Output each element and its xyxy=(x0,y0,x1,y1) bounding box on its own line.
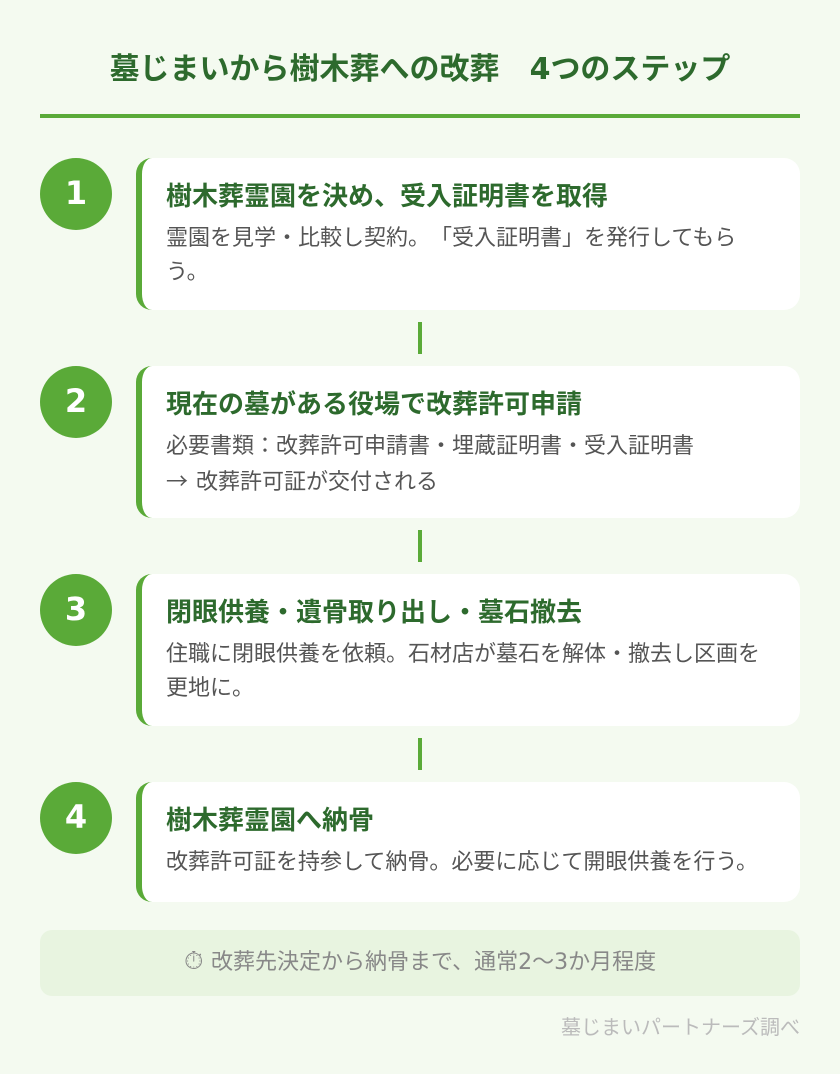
panel: step 1 xyxy=(136,158,800,310)
step 2 description: 必要書類：改葬許可申請書・埋蔵証明書・受入証明書 xyxy=(166,433,694,458)
step 3 description: 住職に閉眼供養を依頼。石材店が墓石を解体・撤去し区画を更地に。 xyxy=(166,641,760,700)
arrow: connector 3 to 4 xyxy=(418,738,422,770)
step 1 number: 1 xyxy=(65,174,87,212)
step 2 heading: 現在の墓がある役場で改葬許可申請 xyxy=(166,389,582,419)
step 1 number xyxy=(40,158,112,230)
step 4 heading: 樹木葬霊園へ納骨 xyxy=(166,805,374,835)
callout: duration note: ⏱ xyxy=(184,947,204,975)
step 2 description: 改葬許可証が交付される xyxy=(196,469,438,494)
arrow: connector 2 to 3 xyxy=(418,530,422,562)
panel: step 4 xyxy=(136,782,800,902)
panel: step 2 xyxy=(136,366,800,518)
step 1 description: 霊園を見学・比較し契約。「受入証明書」を発行してもらう。 xyxy=(166,225,736,284)
step 2 description xyxy=(166,433,694,496)
callout: duration note xyxy=(40,930,800,996)
step 2 number: 2 xyxy=(65,382,87,420)
source credit: 墓じまいパートナーズ調べ xyxy=(561,1017,800,1039)
arrow: connector 1 to 2 xyxy=(418,322,422,354)
step 3 number: 3 xyxy=(65,590,87,628)
callout: duration note: 改葬先決定から納骨まで、通常2〜3か月程度 xyxy=(211,949,656,975)
step 4 number xyxy=(40,782,112,854)
step 2 description: → xyxy=(166,464,188,496)
step 3 heading: 閉眼供養・遺骨取り出し・墓石撤去 xyxy=(166,597,582,627)
step 4 description: 改葬許可証を持参して納骨。必要に応じて開眼供養を行う。 xyxy=(166,849,758,874)
step 4 number: 4 xyxy=(65,798,87,836)
title: 墓じまいから樹木葬への改葬 4つのステップ xyxy=(110,52,730,87)
panel: step 3 xyxy=(136,574,800,726)
step 1 heading: 樹木葬霊園を決め、受入証明書を取得 xyxy=(166,181,608,211)
step 2 number xyxy=(40,366,112,438)
step 3 number xyxy=(40,574,112,646)
